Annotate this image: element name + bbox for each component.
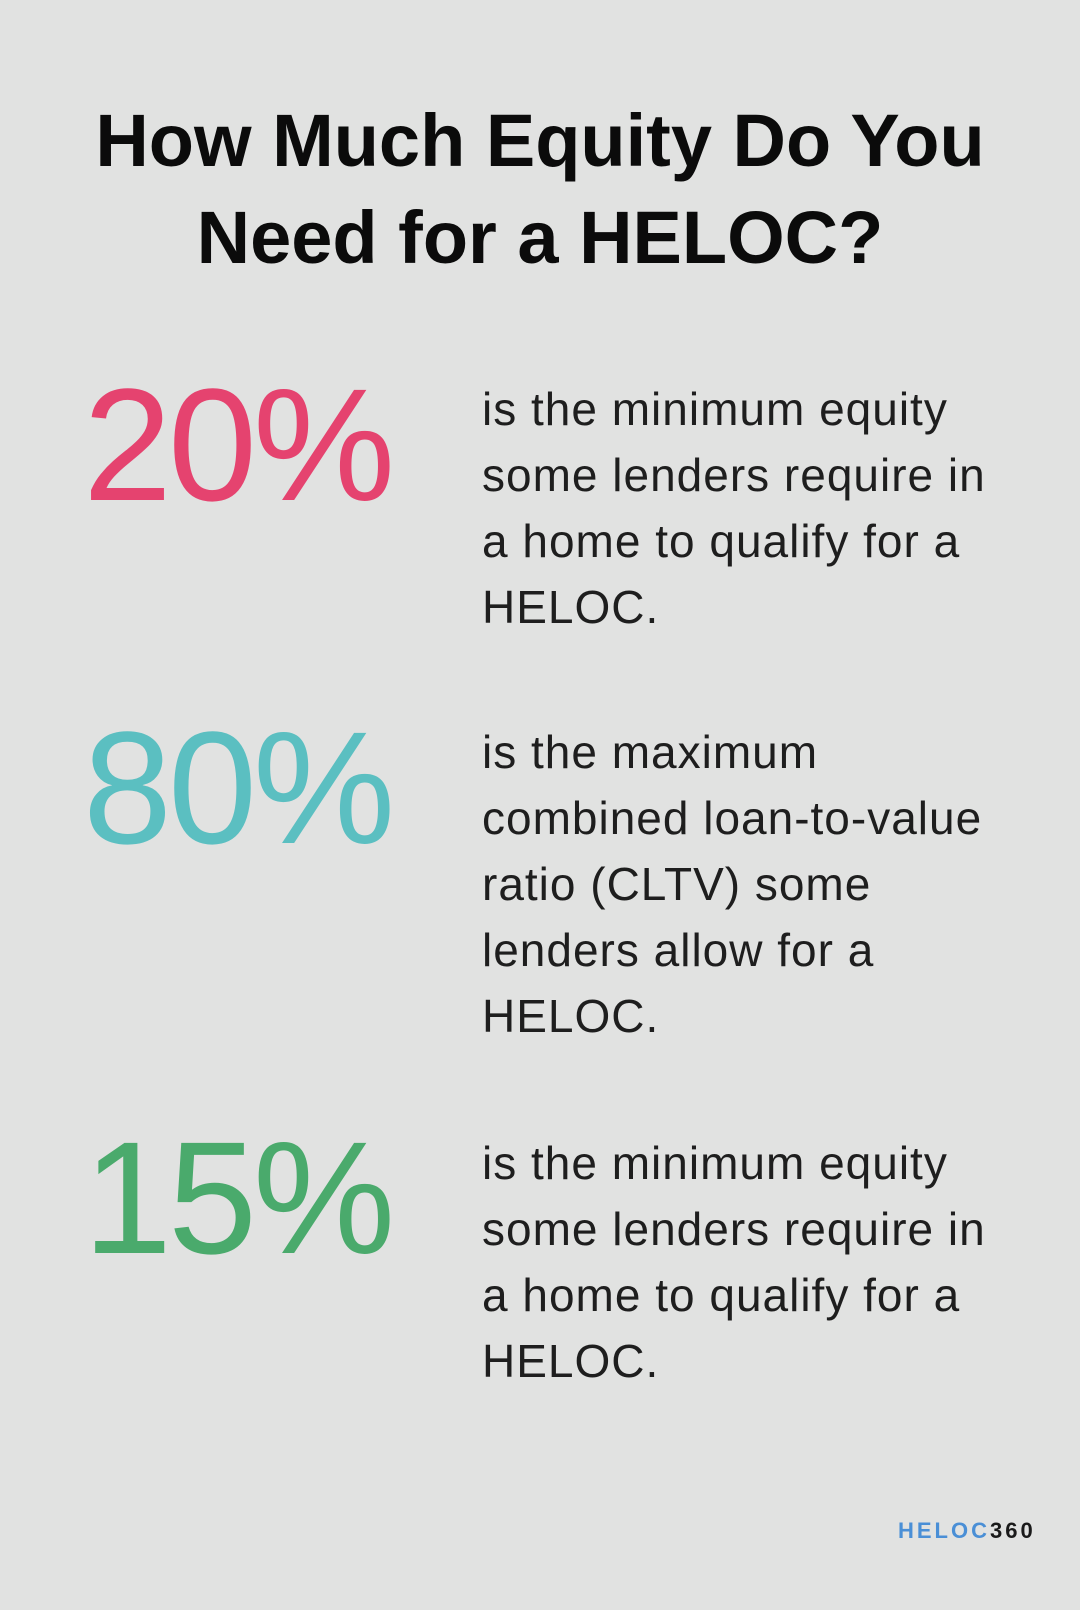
text: 20% description bbox=[482, 383, 986, 633]
text: 15% description bbox=[482, 1137, 986, 1387]
text: 20% description: some lenders require in bbox=[482, 449, 986, 501]
text: 80% description: combined loan-to-value bbox=[482, 792, 982, 844]
stat: 80%: 80% bbox=[83, 698, 391, 877]
text: 80% description bbox=[482, 726, 982, 1042]
text: 15% description: a home to qualify for a bbox=[482, 1269, 960, 1321]
text: 80% description: HELOC. bbox=[482, 990, 659, 1042]
title: How Much Equity Do You bbox=[95, 99, 985, 182]
stat: 15%: 15% bbox=[83, 1108, 391, 1287]
logo: HELOC360 bbox=[898, 1518, 1036, 1543]
text: 80% description: ratio (CLTV) some bbox=[482, 858, 871, 910]
title: Need for a HELOC? bbox=[197, 196, 883, 279]
text: 20% description: a home to qualify for a bbox=[482, 515, 960, 567]
text: 20% description: is the minimum equity bbox=[482, 383, 948, 435]
text: 80% description: is the maximum bbox=[482, 726, 818, 778]
title bbox=[95, 99, 985, 279]
text: 20% description: HELOC. bbox=[482, 581, 659, 633]
text: 15% description: HELOC. bbox=[482, 1335, 659, 1387]
text: 15% description: is the minimum equity bbox=[482, 1137, 948, 1189]
text: 80% description: lenders allow for a bbox=[482, 924, 874, 976]
stat: 20%: 20% bbox=[83, 355, 391, 534]
text: 15% description: some lenders require in bbox=[482, 1203, 986, 1255]
